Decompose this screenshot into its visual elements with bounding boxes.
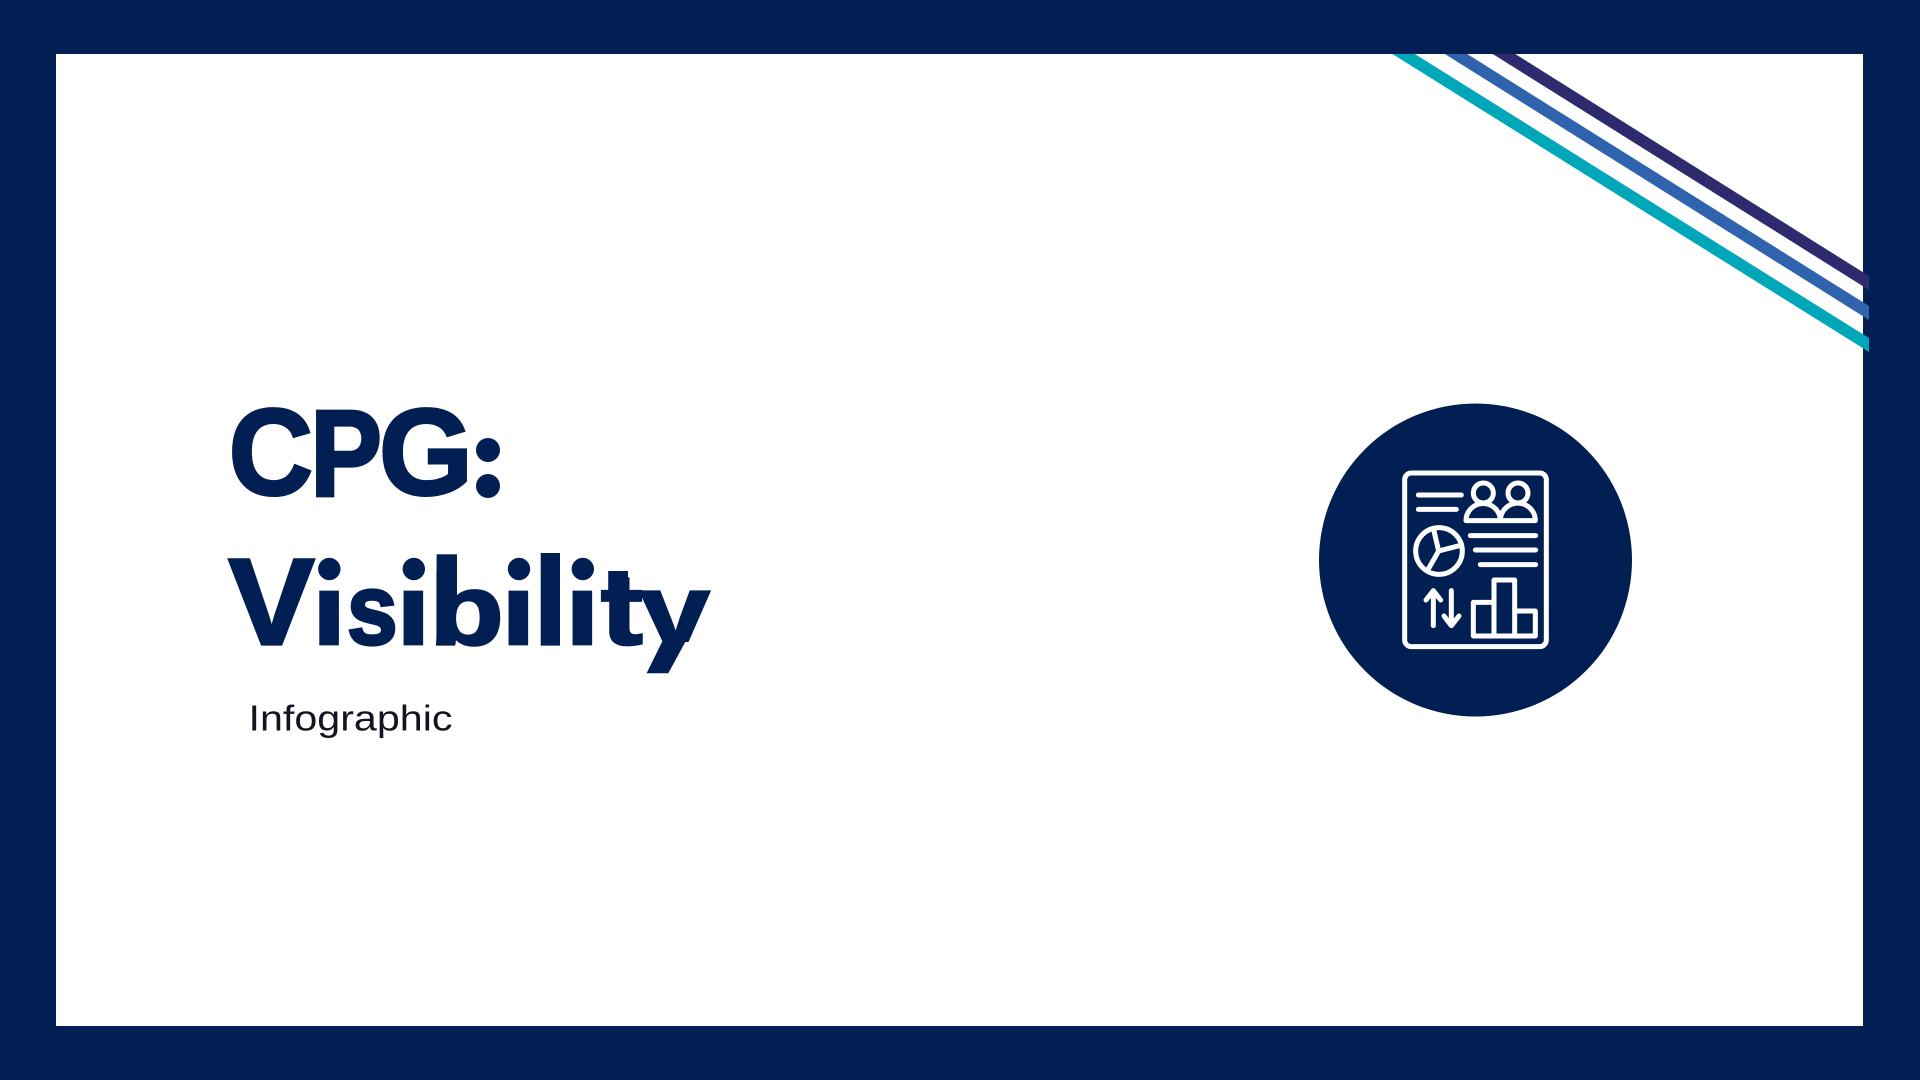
title line: Visibility: i <box>502 556 535 666</box>
title line: Visibility: i <box>566 556 599 666</box>
title line: Visibility: i <box>313 556 346 666</box>
diagonal stripes <box>1392 54 1869 352</box>
subtitle: Infographic <box>248 698 452 739</box>
title line: Visibility: t <box>601 554 643 665</box>
title line: CPG:: G <box>379 384 473 521</box>
title line: Visibility: V <box>228 533 315 671</box>
title line: Visibility: s <box>347 554 398 666</box>
title line: Visibility: y <box>640 552 710 671</box>
title line: CPG:: : <box>473 411 503 512</box>
title line: CPG:: P <box>310 386 382 522</box>
title line: CPG:: C <box>229 385 313 521</box>
title line: Visibility: i <box>397 556 430 666</box>
navy circle <box>1319 404 1632 716</box>
title line: Visibility: b <box>430 554 504 666</box>
title line: Visibility: l <box>534 532 567 671</box>
title line: CPG: <box>229 384 503 522</box>
icon badge: report document <box>1319 404 1632 716</box>
title <box>228 384 710 673</box>
icon: report with people, pie chart, arrows and bars <box>1405 473 1546 647</box>
title line: Visibility <box>227 553 712 674</box>
